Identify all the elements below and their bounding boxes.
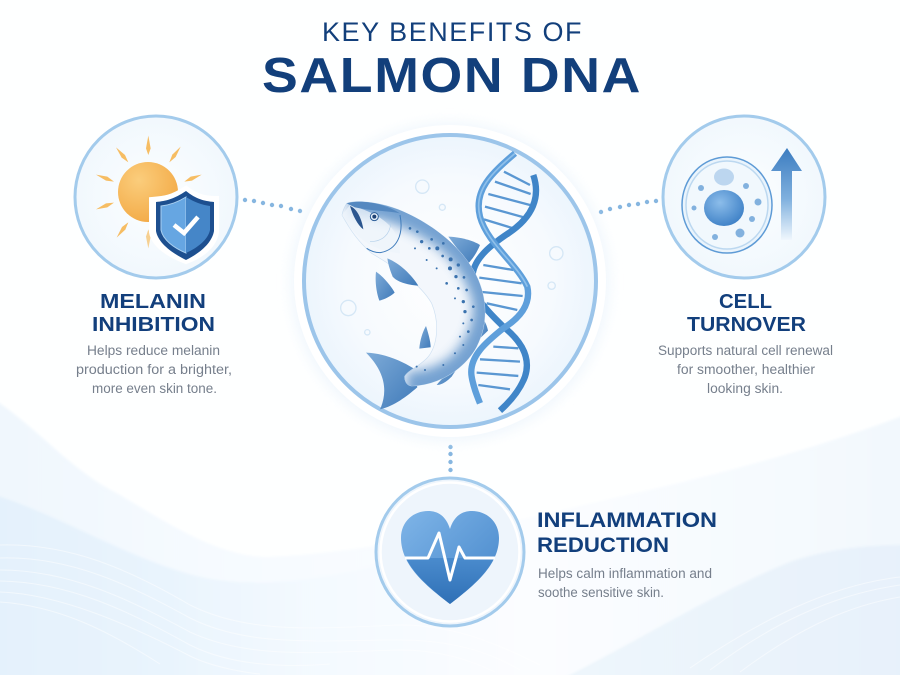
panel: inflammation reduction: [376, 478, 717, 626]
icon: heart with pulse: [376, 478, 524, 626]
description: more even skin tone.: [92, 381, 217, 396]
shield: [152, 189, 216, 261]
sun: [118, 162, 178, 222]
salmon spots: [409, 227, 475, 371]
heading: MELANIN: [100, 290, 206, 313]
panel: melanin inhibition: [75, 116, 237, 396]
cell: [682, 157, 772, 253]
dotted connector: bottom: [448, 445, 453, 472]
DNA helix: [471, 153, 536, 411]
central circle: salmon and DNA: [290, 122, 610, 442]
pectoral fin: [387, 258, 418, 286]
anal fin: [419, 326, 431, 349]
description: production for a brighter,: [76, 362, 232, 377]
description: Helps calm inflammation and: [538, 566, 712, 581]
icon: sun and shield: [75, 116, 237, 278]
sun rays: [96, 136, 202, 248]
description: [658, 343, 833, 396]
salmon: [342, 198, 491, 409]
description: [76, 343, 232, 396]
description: Supports natural cell renewal: [658, 343, 833, 358]
ventral fin: [376, 272, 395, 301]
title: [262, 17, 642, 103]
body: [342, 202, 485, 386]
heading line 2: REDUCTION: [537, 534, 669, 557]
description: [538, 566, 712, 600]
description: for smoother, healthier: [677, 362, 816, 377]
title line 2: SALMON DNA: [262, 49, 642, 103]
title line 1: KEY BENEFITS OF: [322, 17, 583, 47]
description: soothe sensitive skin.: [538, 585, 664, 600]
bubbles: [341, 180, 563, 335]
panel: cell turnover: [658, 116, 833, 396]
heading line 2: TURNOVER: [687, 313, 806, 336]
dotted connector: left: [243, 198, 302, 213]
eye: [370, 213, 378, 221]
dorsal fin: [448, 237, 480, 263]
heading: INFLAMMATION: [537, 509, 717, 532]
heading: CELL: [719, 290, 772, 313]
description: looking skin.: [707, 381, 783, 396]
dotted connector: right: [599, 199, 658, 214]
icon: cell with arrow: [663, 116, 825, 278]
heading line 2: INHIBITION: [92, 313, 215, 336]
description: Helps reduce melanin: [87, 343, 220, 358]
tail: [366, 353, 417, 409]
arrow up: [771, 148, 802, 240]
